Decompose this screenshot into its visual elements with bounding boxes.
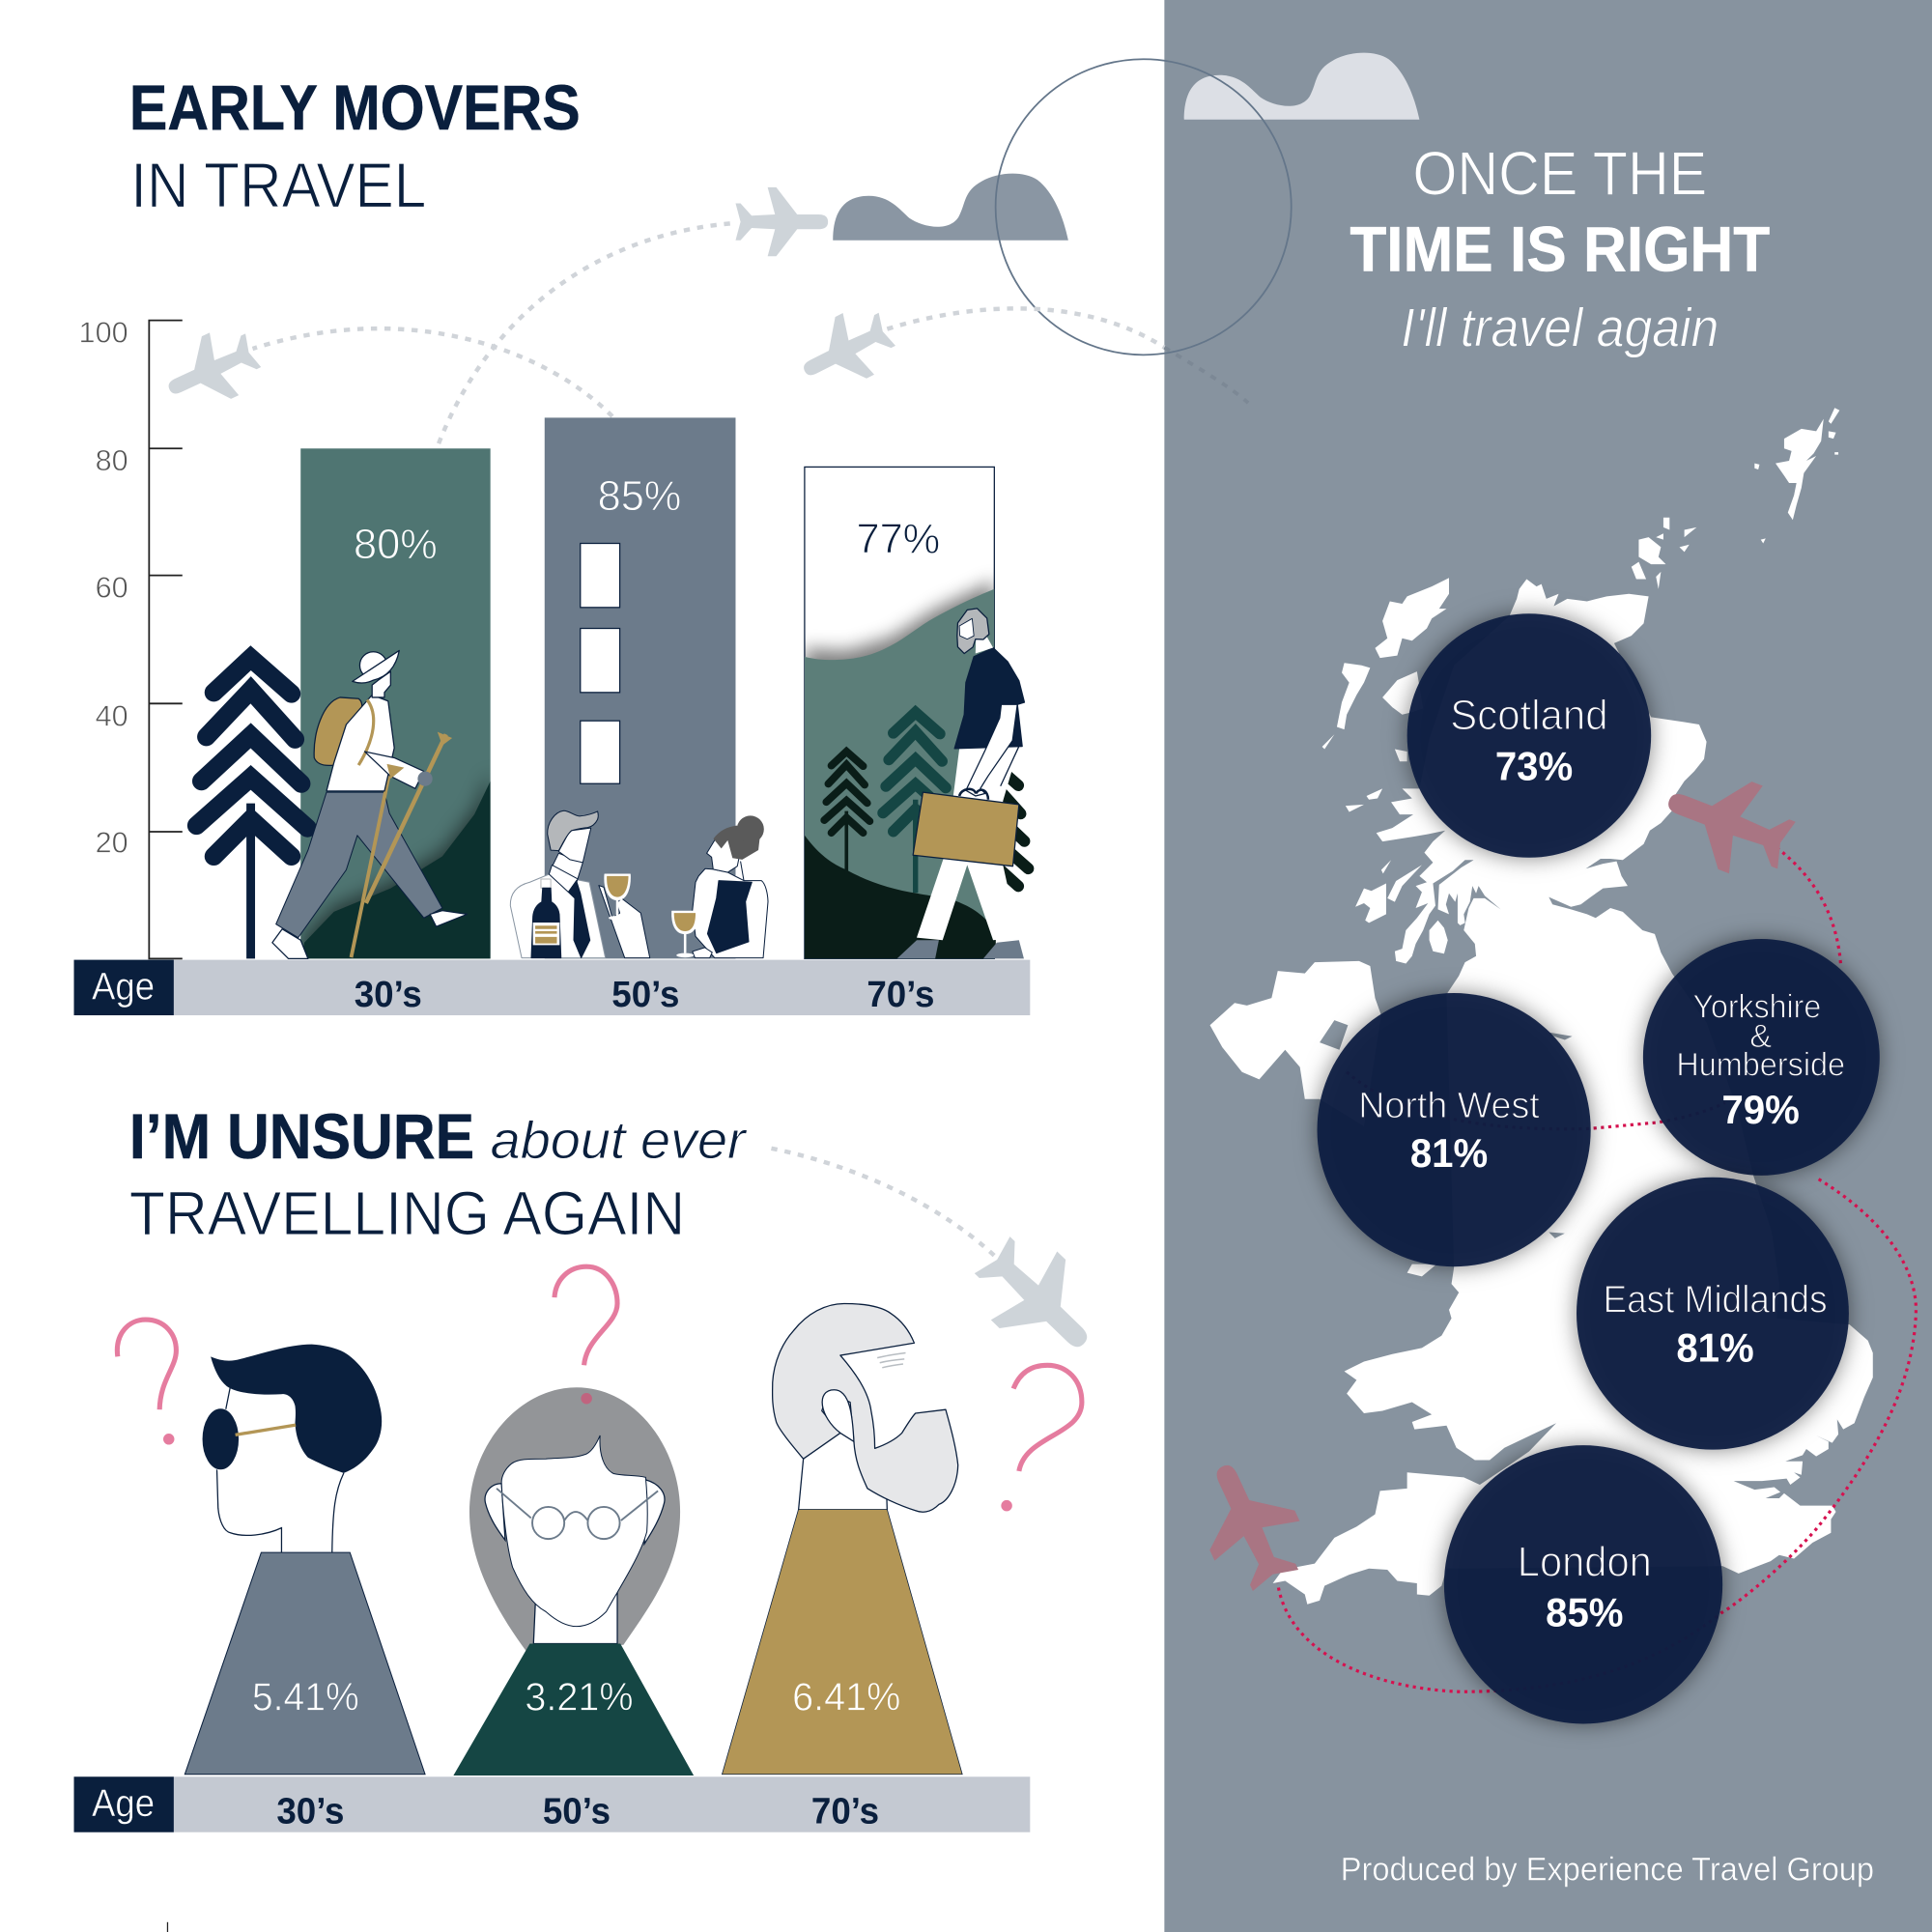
hair <box>211 1345 382 1473</box>
region: Yorkshire & Humberside <box>1643 939 1880 1176</box>
y axis labels <box>79 317 128 860</box>
illustration: woman with wine <box>672 815 768 958</box>
region: North West: North West <box>1358 1085 1540 1126</box>
region: East Midlands <box>1577 1178 1849 1450</box>
region: Yorkshire & Humberside: Yorkshire <box>1693 989 1821 1026</box>
region: Scotland: 73% <box>1495 743 1573 788</box>
hair and beard <box>773 1303 958 1512</box>
y axis <box>149 321 183 958</box>
Great Britain <box>1273 579 1873 1605</box>
age axis: bottom chart: 70’s <box>811 1791 879 1833</box>
icon: plane left <box>155 319 268 421</box>
y axis labels: 60 <box>96 572 128 605</box>
large circle outline <box>996 59 1292 355</box>
jumper: 5.41%: 5.41% <box>252 1674 359 1719</box>
dotted flight path: scotland to yorkshire <box>1776 848 1841 966</box>
heading: I'm unsure <box>129 1101 748 1248</box>
figure: 30s person <box>185 1345 425 1775</box>
age axis: top chart <box>74 960 1030 1015</box>
region: East Midlands: East Midlands <box>1603 1278 1828 1321</box>
region: Yorkshire & Humberside: Humberside <box>1676 1047 1845 1084</box>
credit: Produced by Experience Travel Group <box>1341 1851 1874 1888</box>
heading: I'm unsure: I’M UNSURE <box>129 1101 474 1173</box>
dotted flight path: on panel <box>1164 348 1248 403</box>
icon: pine tree <box>196 658 307 958</box>
heading: once the time is right <box>1350 139 1770 357</box>
jumper: 6.41%: 6.41% <box>792 1674 900 1719</box>
glasses <box>202 1408 239 1470</box>
title: early movers in travel: IN TRAVEL <box>130 150 426 221</box>
bar: 50s <box>545 417 735 958</box>
illustration: man with briefcase <box>897 609 1024 958</box>
jumper: 5.41% <box>185 1552 425 1775</box>
heading: I'm unsure: TRAVELLING AGAIN <box>129 1179 685 1248</box>
illustration: man with wine <box>510 810 650 958</box>
age axis: bottom chart: 30’s <box>276 1791 345 1833</box>
dotted flight paths: grey <box>252 223 1164 1257</box>
age axis: bottom chart <box>74 1776 1030 1833</box>
bar: 30s: 80% <box>354 522 438 568</box>
icon: plane lower <box>959 1221 1117 1378</box>
jumper: 3.21% <box>453 1644 694 1776</box>
jumper: 6.41% <box>722 1509 962 1775</box>
cloud: right <box>1184 53 1419 120</box>
icon: plane top <box>735 187 828 256</box>
title: early movers in travel <box>129 72 581 221</box>
heading: I'm unsure: about ever <box>491 1110 748 1170</box>
age axis: bottom chart: 50’s <box>543 1791 611 1833</box>
glasses <box>497 1489 658 1539</box>
Northern Ireland <box>1210 961 1381 1126</box>
age axis: top chart: Age <box>92 965 155 1008</box>
icon: pink plane west <box>1179 1447 1319 1601</box>
icon: plane middle <box>789 298 903 402</box>
heading: once the time is right: TIME IS RIGHT <box>1350 214 1770 286</box>
age axis: top chart: 50’s <box>611 974 679 1015</box>
cloud: left <box>833 174 1068 241</box>
bar: 70s: 77% <box>856 517 940 563</box>
map: United Kingdom <box>1210 408 1873 1605</box>
y axis labels: 80 <box>96 444 128 477</box>
age axis: top chart: 30’s <box>355 974 422 1015</box>
jumper: 3.21%: 3.21% <box>525 1674 634 1719</box>
region: London <box>1444 1445 1722 1723</box>
region: North West <box>1318 993 1591 1266</box>
bar: 50s: 85% <box>598 473 681 520</box>
heading: once the time is right: I'll travel again <box>1401 297 1719 357</box>
region: Scotland <box>1407 613 1651 858</box>
region: North West: 81% <box>1410 1130 1488 1176</box>
heading: once the time is right: ONCE THE <box>1412 139 1707 209</box>
bar: 30s <box>300 448 491 958</box>
y axis labels: 20 <box>96 827 128 860</box>
illustration: hiker <box>272 650 467 958</box>
ear <box>822 1390 854 1441</box>
bar chart: early movers by age <box>79 317 1028 958</box>
panel: once the time is right <box>1164 0 1932 1932</box>
figure: 70s person <box>722 1303 962 1775</box>
title: early movers in travel: EARLY MOVERS <box>129 72 581 144</box>
figure: 50s person <box>453 1387 694 1776</box>
question marks <box>117 1266 1082 1510</box>
region: London: London <box>1518 1539 1652 1585</box>
icon: pink plane east <box>1653 756 1804 889</box>
region: London: 85% <box>1546 1590 1623 1635</box>
estuaries <box>1548 1033 1573 1238</box>
bar: 70s <box>805 467 1028 958</box>
age axis: top chart: 70’s <box>867 974 934 1015</box>
dotted flight path: yorkshire around to cornwall <box>1278 1179 1916 1691</box>
age axis: bottom chart: Age <box>92 1782 155 1825</box>
y axis labels: 40 <box>96 699 128 732</box>
region: Scotland: Scotland <box>1450 693 1608 739</box>
islands <box>1322 408 1839 1276</box>
y axis labels: 100 <box>79 317 128 350</box>
region: Yorkshire & Humberside: 79% <box>1722 1087 1800 1132</box>
dotted flight path: north west to yorkshire <box>1347 1072 1725 1129</box>
brow <box>877 1353 906 1368</box>
region: East Midlands: 81% <box>1676 1324 1754 1370</box>
region: Yorkshire & Humberside: & <box>1749 1018 1772 1055</box>
